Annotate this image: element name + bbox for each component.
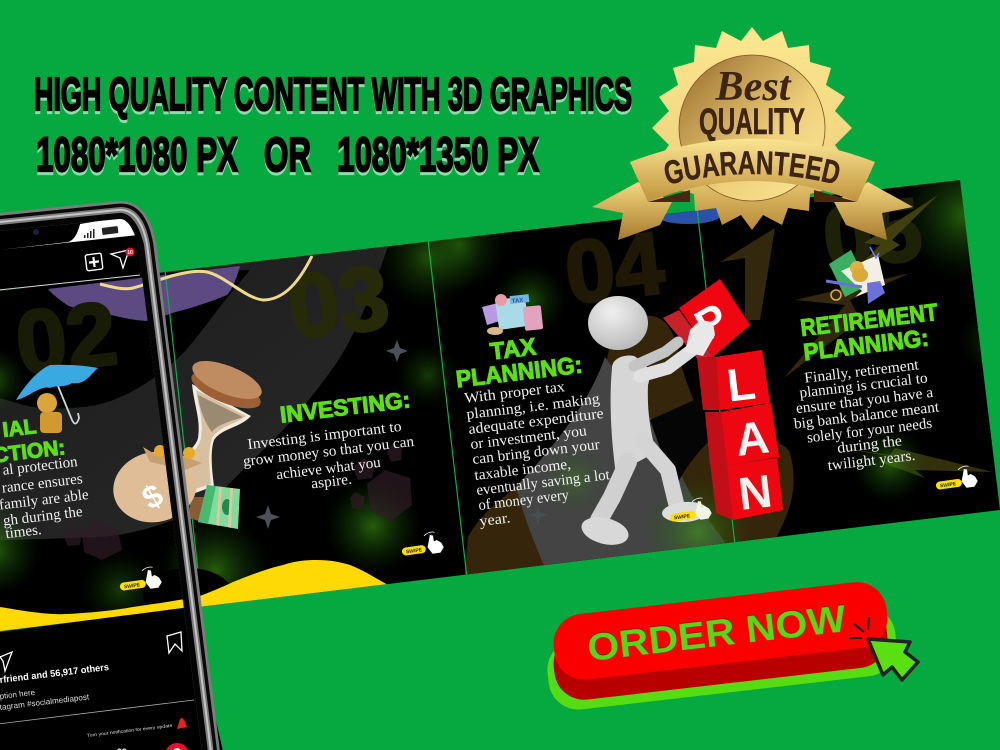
swipe hint: panel 3 — [402, 532, 444, 556]
icon: retirement planning items — [826, 247, 885, 304]
heading: tax planning — [456, 337, 582, 388]
swipe hint: panel 4 — [668, 497, 712, 524]
starburst seal — [652, 27, 852, 230]
heading: retirement planning — [800, 302, 938, 361]
sparkle stars — [256, 340, 548, 529]
decorative hexagons — [63, 444, 412, 560]
likes text: rfriend and 56,917 others — [0, 662, 110, 686]
heading: investing: INVESTING: — [278, 386, 412, 428]
phone: post footer — [0, 607, 225, 750]
icon: umbrella and coins — [16, 365, 98, 433]
red button face — [550, 579, 891, 683]
tan ribbon curve — [100, 256, 312, 300]
text: financial protection body: family are able — [0, 487, 90, 514]
text: tax planning body: taxable income, — [474, 457, 572, 484]
inner white dot — [173, 748, 181, 750]
icon: messages with badge — [111, 248, 134, 268]
button: order now — [544, 579, 918, 713]
inner medallion — [679, 55, 825, 201]
heading: tax planning: PLANNING: — [454, 352, 584, 393]
icon: share arrow — [0, 652, 12, 671]
icon: red button — [165, 743, 189, 750]
icon: messages with badge: 10 — [127, 250, 133, 256]
lightning bolts — [720, 195, 993, 503]
illustration: cash stack — [198, 485, 240, 529]
illustration: money bag: $ — [136, 476, 169, 517]
heading: financial protection — [0, 419, 64, 462]
text: investing body: achieve what you — [275, 455, 382, 483]
text: investing body: Investing is important to — [247, 419, 402, 453]
status bar notch — [0, 217, 138, 251]
word quality: QUALITY — [699, 101, 805, 142]
text: tax planning body — [464, 379, 611, 530]
text: investing body: aspire. — [310, 472, 353, 492]
text: retirement planning body: Finally, retirement — [803, 357, 920, 387]
purple shape — [48, 266, 240, 321]
icon: red bell — [177, 718, 187, 729]
illustration: plan cubes: N — [736, 464, 775, 520]
click sparks — [849, 617, 869, 638]
signal bars — [84, 226, 118, 238]
panel dividers — [165, 208, 735, 608]
text: tax planning body: or investment, you — [470, 423, 588, 453]
panel: carousel banner — [0, 150, 1000, 650]
text: retirement planning body: twilight years. — [827, 448, 916, 474]
gray shape panel 4 — [516, 357, 727, 570]
black blob — [0, 270, 250, 408]
swipe hint: panel 2: SWIPE — [124, 582, 141, 590]
swipe hint: panel 5: SWIPE — [940, 481, 957, 489]
text: retirement planning body: planning is crucial to — [799, 370, 929, 402]
number 02: 02 — [11, 284, 122, 395]
badge: best quality guaranteed — [592, 27, 913, 240]
gray crescent background — [0, 230, 400, 542]
text: tax planning body: With proper tax — [464, 379, 566, 407]
glows — [0, 150, 1000, 630]
notification text: Turn your notification for every update — [87, 723, 173, 738]
text: retirement planning body: solely for your needs — [806, 416, 933, 446]
illustration: money bag — [113, 445, 202, 522]
swipe hint: panel 3: SWIPE — [406, 547, 423, 555]
heading: financial protection: IAL — [1, 415, 38, 442]
illustration: plan cubes: L — [724, 357, 758, 412]
text: investing body: grow money so that you can — [242, 434, 415, 470]
illustration: plan cubes: P — [687, 294, 737, 351]
yellow wave — [0, 560, 387, 631]
ribbon band — [630, 138, 875, 202]
camera dot — [33, 229, 39, 235]
ribbon fold shadows — [648, 190, 857, 202]
illustration: plan cubes: A — [733, 410, 772, 466]
text: tax planning body: of money every — [478, 487, 570, 514]
icon: tax documents: TAX — [512, 298, 524, 305]
blue shape under badge — [662, 208, 720, 224]
text: retirement planning body: during the — [836, 433, 903, 457]
text: tax planning body: year. — [479, 510, 511, 530]
number 03: 03 — [283, 248, 394, 359]
text: financial protection body: times. — [5, 522, 42, 542]
headline: size options: 1080*1080 PX OR 1080*1350 PX — [36, 129, 539, 182]
text: tax planning body: adequate expenditure — [468, 406, 605, 438]
black inset panel 4 — [650, 400, 708, 481]
heading: retirement planning: PLANNING: — [802, 325, 930, 366]
glow over panel 4 base — [657, 489, 741, 550]
black lump above wave — [143, 568, 231, 607]
text: retirement planning body: ensure that you have a — [795, 385, 934, 417]
phone frame — [0, 205, 216, 750]
illustration: stick figure — [579, 296, 715, 549]
cursor arrow — [868, 639, 918, 680]
icon: add post — [85, 253, 103, 271]
illustration: hourglass — [183, 361, 262, 524]
glow behind body text panel 4 — [558, 463, 592, 496]
text: investing body — [244, 424, 414, 490]
ribbon tails — [592, 182, 913, 240]
text: tax planning body: can bring down your — [472, 437, 601, 468]
illustration: plan cubes — [663, 279, 783, 520]
text: financial protection body: rance ensures — [1, 471, 84, 497]
hashtags text: tagram #socialmediapost — [0, 692, 90, 712]
text: retirement planning body — [793, 357, 941, 474]
footer divider — [0, 700, 194, 725]
swipe hint: panel 5 — [934, 465, 978, 492]
header divider — [0, 275, 140, 291]
text: tax planning body: eventually saving a lot — [476, 467, 611, 499]
caption text: ption here — [0, 688, 36, 701]
lime base — [544, 603, 900, 713]
swipe hint: panel 2 — [118, 566, 162, 593]
icon: tax documents — [482, 294, 543, 335]
text: financial protection body: gh during the — [2, 504, 84, 529]
text: tax planning body: planning, i.e. making — [466, 391, 601, 423]
heading: tax planning: TAX — [489, 333, 538, 366]
heading: retirement planning: RETIREMENT — [799, 299, 940, 342]
notch black cover — [0, 208, 80, 249]
phone: status bar and app header — [0, 203, 157, 292]
text: financial protection body — [0, 458, 88, 538]
text: retirement planning body: big bank balance meant — [793, 399, 941, 433]
icon: bookmark — [167, 632, 182, 653]
button label: ORDER NOW — [585, 598, 848, 670]
text: financial protection body: al protection — [2, 454, 79, 479]
swipe hint: panel 4: SWIPE — [674, 513, 691, 521]
brown backdrop panel 4 — [464, 315, 794, 580]
red button side — [550, 599, 891, 703]
number 04: 04 — [560, 213, 669, 323]
script word best: Best — [714, 64, 792, 110]
word guaranteed: GUARANTEED — [664, 151, 840, 184]
number 05: 05 — [818, 179, 927, 289]
